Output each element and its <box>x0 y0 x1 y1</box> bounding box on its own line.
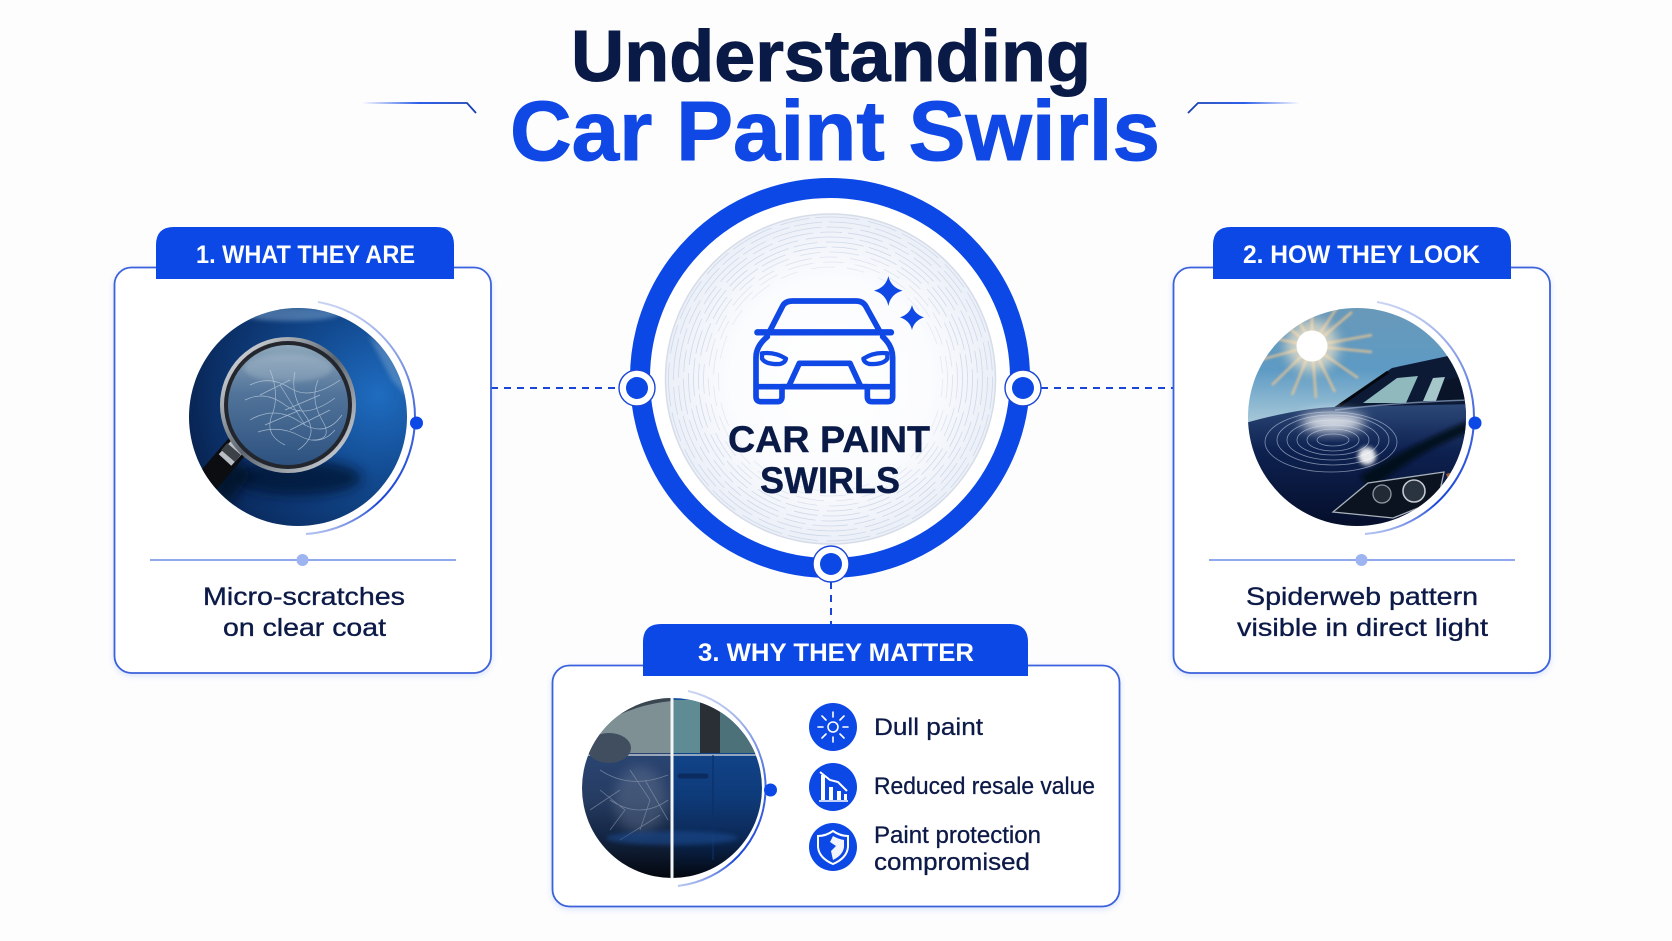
icon: falling bars <box>809 763 857 811</box>
panel: why they matter <box>552 624 1120 906</box>
tab heading: how they look <box>1213 227 1511 279</box>
item: reduced resale value <box>809 763 1095 811</box>
arc marker <box>410 416 423 430</box>
arc marker <box>1468 416 1482 430</box>
title line 2: Car Paint Swirls <box>510 84 1160 178</box>
description <box>203 583 405 642</box>
photo: car hood in direct sunlight <box>1248 308 1466 526</box>
title <box>510 17 1160 178</box>
badge label: CAR PAINT <box>728 419 930 460</box>
tab heading: why they matter <box>643 624 1028 676</box>
item: dull paint <box>809 703 983 751</box>
left title accent line <box>362 103 476 113</box>
panel: what they are <box>114 227 491 673</box>
description <box>1237 583 1488 642</box>
node: bottom <box>813 546 849 582</box>
divider <box>1209 554 1515 566</box>
progress arc <box>678 691 766 886</box>
description: Micro-scratches <box>203 583 405 611</box>
tab heading: what they are <box>156 227 454 279</box>
item: paint protection compromised: Paint protection <box>874 822 1041 849</box>
title line 1: Understanding <box>571 17 1091 97</box>
item: paint protection compromised <box>809 822 1041 876</box>
item: paint protection compromised: compromised <box>874 849 1030 876</box>
divider <box>150 554 456 566</box>
badge label <box>728 419 930 501</box>
tab heading: how they look: 2. HOW THEY LOOK <box>1243 241 1480 269</box>
description: Spiderweb pattern <box>1246 583 1478 611</box>
icon: dull sparkle <box>809 703 857 751</box>
icon: car with sparkles <box>756 276 924 402</box>
photo: magnifying glass over scratched paint <box>185 304 411 530</box>
description: visible in direct light <box>1237 614 1488 642</box>
description: on clear coat <box>223 614 386 642</box>
swirl disc <box>666 214 996 544</box>
progress arc <box>1365 302 1474 534</box>
tab heading: what they are: 1. WHAT THEY ARE <box>196 241 415 269</box>
badge label: SWIRLS <box>760 460 900 501</box>
item: dull paint: Dull paint <box>874 714 983 741</box>
connector lines <box>491 388 1173 624</box>
right title accent line <box>1188 103 1300 113</box>
item: reduced resale value: Reduced resale value <box>874 773 1095 800</box>
badge ring <box>640 188 1020 568</box>
progress arc <box>306 302 415 534</box>
node: right <box>1005 370 1041 406</box>
node: left <box>619 370 655 406</box>
tab heading: why they matter: 3. WHY THEY MATTER <box>698 639 974 667</box>
icon: cracked shield <box>809 823 857 871</box>
panel: how they look <box>1174 227 1550 673</box>
arc marker <box>764 784 777 796</box>
photo: before and after car door <box>580 696 764 882</box>
central badge <box>619 188 1041 582</box>
